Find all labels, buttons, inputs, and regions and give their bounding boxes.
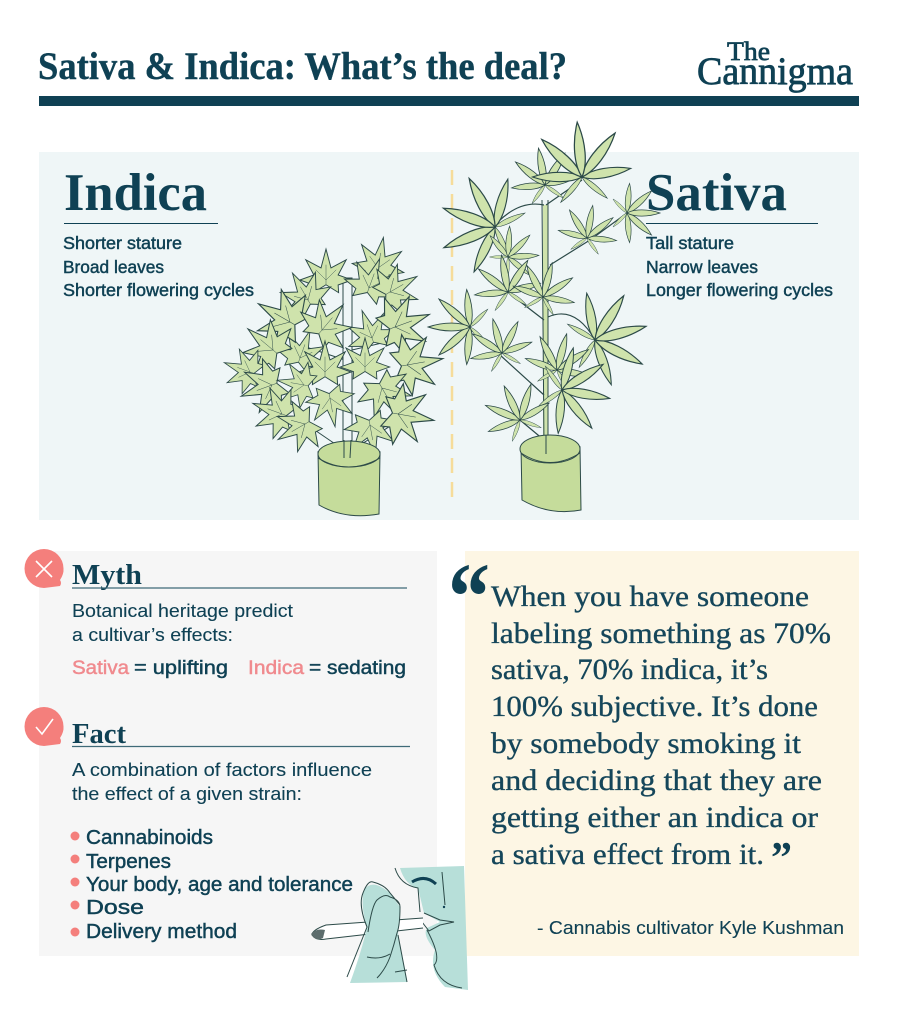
divider: dashed line xyxy=(451,170,453,502)
logo: The Cannigma: The xyxy=(727,37,770,66)
indica text block: Shorter flowering cycles xyxy=(63,280,254,300)
list of factors: Your body, age and tolerance xyxy=(86,874,353,896)
illustration: indica plant xyxy=(216,233,448,462)
fact text: the effect of a given strain: xyxy=(72,784,302,804)
fact heading: Fact xyxy=(72,718,126,750)
quote text: a sativa effect from it. xyxy=(491,838,764,871)
indica text block: Shorter stature xyxy=(63,233,182,253)
icon: fact check xyxy=(25,707,64,746)
indica text block xyxy=(63,164,254,300)
list of factors: Dose xyxy=(86,897,144,919)
myth text: Sativa xyxy=(72,658,129,679)
list of factors: Cannabinoids xyxy=(86,827,213,849)
sativa text block: Narrow leaves xyxy=(646,257,758,277)
sativa text block xyxy=(646,164,833,300)
quote text: by somebody smoking it xyxy=(491,727,802,760)
logo: The Cannigma: Cannigma xyxy=(697,50,853,93)
quote text: ” xyxy=(771,833,792,882)
header rule xyxy=(39,96,859,106)
illustration: sativa plant xyxy=(426,118,660,450)
quote text xyxy=(491,580,831,882)
illustration: person smoking xyxy=(311,866,468,990)
list of factors xyxy=(70,827,353,943)
fact text: A combination of factors influence xyxy=(72,760,372,780)
panel: quote xyxy=(465,551,859,956)
illustration: sativa pot xyxy=(520,435,581,512)
myth text: = uplifting xyxy=(134,658,228,679)
quote attribution: - Cannabis cultivator Kyle Kushman xyxy=(537,917,844,938)
title: Sativa & Indica: What’s the deal? xyxy=(38,45,567,88)
quote text: When you have someone xyxy=(491,580,809,613)
panel: plant comparison xyxy=(39,152,859,520)
indica text block: Indica xyxy=(64,164,207,222)
sativa text block: Sativa xyxy=(646,164,787,222)
fact text xyxy=(72,760,372,804)
myth text xyxy=(72,601,406,679)
illustration: indica pot xyxy=(318,440,380,516)
sativa text block: Longer flowering cycles xyxy=(646,280,833,300)
icon: myth cross xyxy=(25,549,64,588)
myth text: a cultivar’s effects: xyxy=(72,625,233,645)
quote text: and deciding that they are xyxy=(491,764,822,797)
myth heading: Myth xyxy=(72,559,142,591)
panel: myth and fact xyxy=(39,551,437,956)
quote text: getting either an indica or xyxy=(491,801,818,834)
myth text: Indica xyxy=(248,658,304,679)
indica text block: Broad leaves xyxy=(63,257,164,277)
quote text: sativa, 70% indica, it’s xyxy=(491,653,768,686)
quote text: 100% subjective. It’s done xyxy=(491,690,818,723)
quotation mark: “ xyxy=(448,543,490,650)
list of factors: Delivery method xyxy=(86,921,237,943)
quote text: labeling something as 70% xyxy=(491,617,831,650)
myth text: = sedating xyxy=(309,658,406,679)
sativa text block: Tall stature xyxy=(646,233,734,253)
list of factors: Terpenes xyxy=(86,851,171,873)
myth text: Botanical heritage predict xyxy=(72,601,293,621)
